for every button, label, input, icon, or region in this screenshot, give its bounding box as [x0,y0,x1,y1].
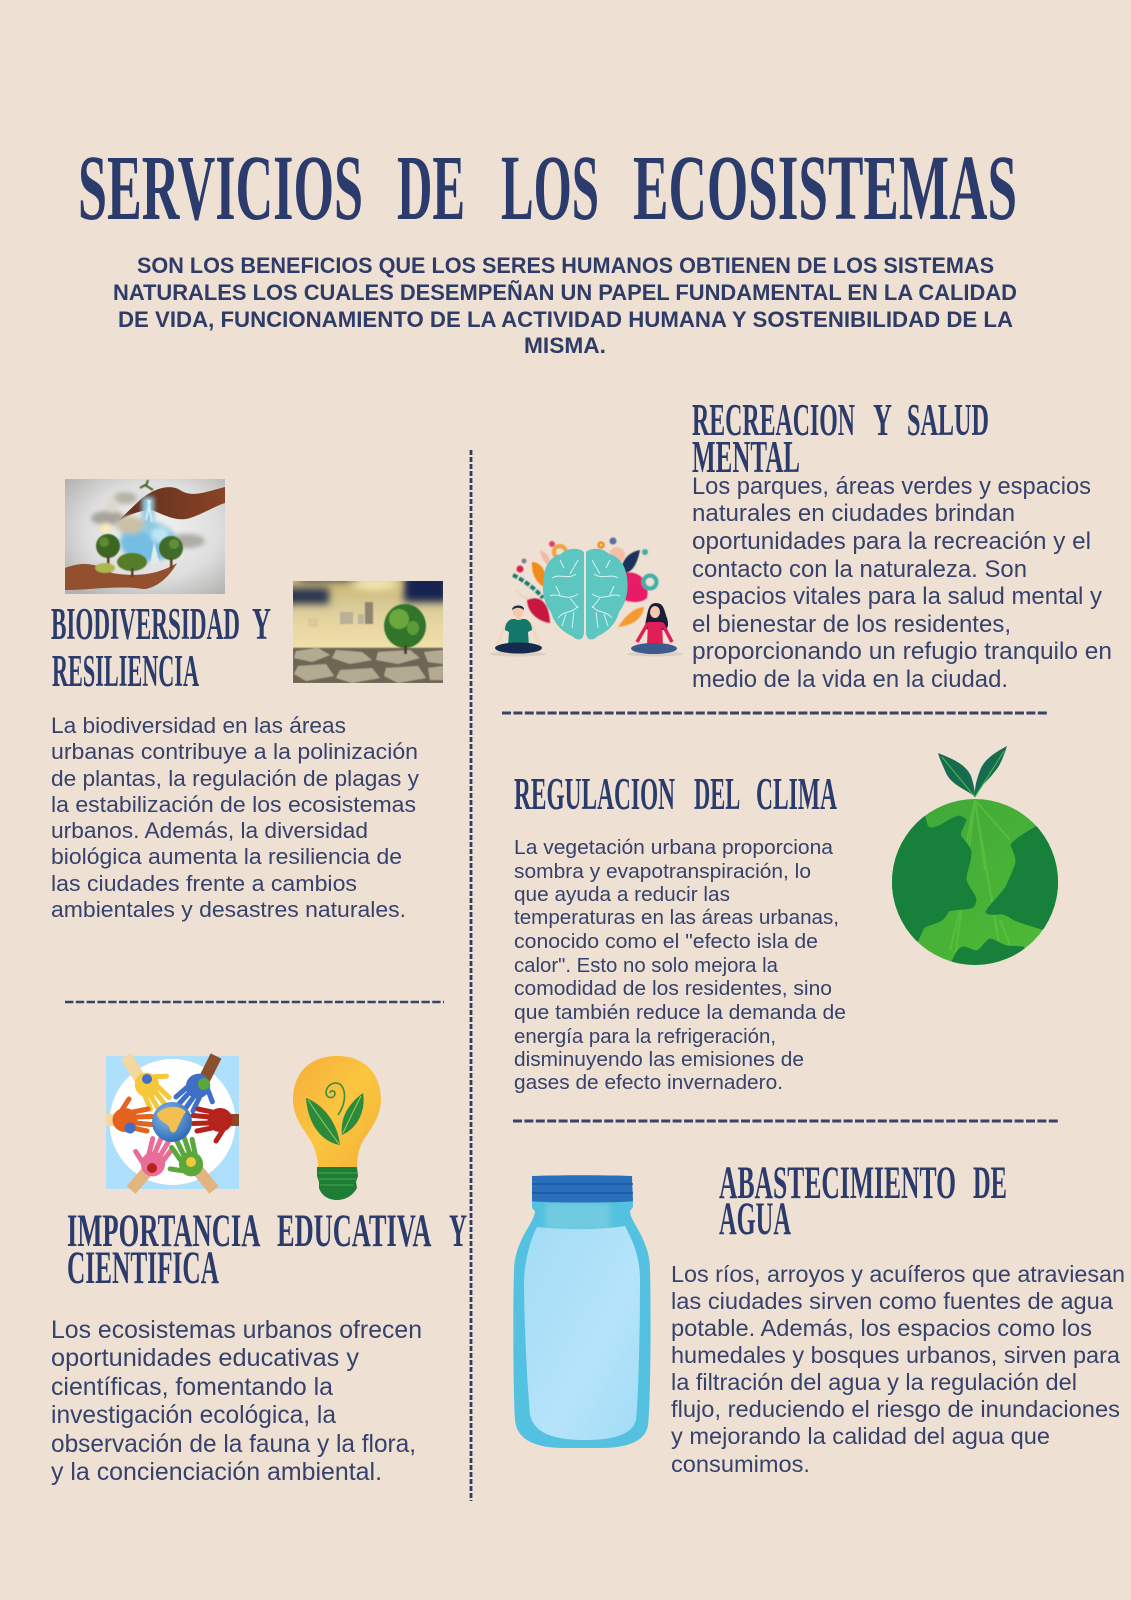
heading: recreacion y salud mental [692,394,989,482]
text: regulacion del clima: energía para la refrigeración, [514,1025,776,1048]
text: recreacion: espacios vitales para la salud mental y [692,583,1102,610]
text: biodiversidad: biológica aumenta la resiliencia de [51,844,402,869]
icon: green globe with leaves [892,746,1058,965]
text: regulacion del clima: temperaturas en las áreas urbanas, [514,906,839,929]
text: abastecimiento de agua: Los ríos, arroyos y acuíferos que atraviesan [671,1261,1125,1287]
text: abastecimiento de agua: la filtración del agua y la regulación del [671,1369,1077,1395]
text: regulacion del clima: comodidad de los residentes, sino [514,977,832,1000]
text: abastecimiento de agua: consumimos. [671,1451,810,1477]
text: biodiversidad: de plantas, la regulación de plagas y [51,766,420,791]
intro text: NATURALES LOS CUALES DESEMPEÑAN UN PAPEL FUNDAMENTAL EN LA CALIDAD [113,280,1017,305]
heading: recreacion y salud mental: SALUD [907,394,989,445]
text: recreacion: Los parques, áreas verdes y espacios [692,473,1091,500]
text: recreacion: el bienestar de los residentes, [692,611,1011,638]
text: regulacion del clima: sombra y evapotranspiración, lo [514,860,811,883]
text: abastecimiento de agua: humedales y bosques urbanos, sirven para [671,1342,1121,1368]
icon: brain and meditating people [490,538,683,656]
heading: biodiversidad y resiliencia [51,599,271,696]
text: abastecimiento de agua: potable. Además, los espacios como los [671,1315,1092,1341]
heading: abastecimiento de agua: AGUA [719,1193,791,1245]
title: SERVICIOS [78,137,363,240]
intro text: DE VIDA, FUNCIONAMIENTO DE LA ACTIVIDAD HUMANA Y SOSTENIBILIDAD DE LA [118,307,1013,332]
heading: recreacion y salud mental: MENTAL [692,431,800,482]
text: abastecimiento de agua: y mejorando la calidad del agua que [671,1423,1050,1449]
text: biodiversidad: urbanas contribuye a la polinización [51,739,418,764]
text: importancia educativa: científicas, fomentando la [51,1374,333,1401]
text: biodiversidad: La biodiversidad en las áreas [51,713,346,738]
heading: importancia educativa y cientifica: IMPORTANCIA [67,1205,260,1257]
text: abastecimiento de agua [671,1261,1125,1477]
heading: regulacion del clima: DEL [694,768,739,819]
text: importancia educativa: oportunidades educativas y [51,1345,360,1372]
text: abastecimiento de agua: las ciudades sirven como fuentes de agua [671,1288,1114,1314]
text: regulacion del clima: que ayuda a reducir las [514,883,730,906]
text: recreacion [692,473,1112,693]
text: biodiversidad [51,713,420,922]
intro text [113,253,1017,358]
icon: water jar [513,1175,651,1448]
title: DE [397,137,465,240]
text: regulacion del clima: La vegetación urbana proporciona [514,836,834,859]
heading: abastecimiento de agua: DE [973,1157,1007,1209]
heading: regulacion del clima: CLIMA [756,768,837,819]
text: regulacion del clima [514,836,846,1094]
heading: abastecimiento de agua [719,1157,1007,1245]
text: biodiversidad: ambientales y desastres naturales. [51,897,406,922]
heading: regulacion del clima: REGULACION [514,768,675,819]
text: importancia educativa: Los ecosistemas urbanos ofrecen [51,1317,422,1344]
text: regulacion del clima: conocido como el "efecto isla de [514,930,818,953]
text: importancia educativa: observación de la fauna y la flora, [51,1431,416,1458]
heading: importancia educativa y cientifica: Y [449,1205,467,1257]
icon: light bulb with leaves [293,1056,381,1200]
text: recreacion: proporcionando un refugio tranquilo en [692,638,1112,665]
title: LOS [501,137,599,240]
text: recreacion: oportunidades para la recreación y el [692,528,1091,555]
text: importancia educativa: y la concienciación ambiental. [51,1459,382,1486]
heading: importancia educativa y cientifica [67,1205,467,1294]
text: recreacion: naturales en ciudades brindan [692,500,1015,527]
heading: recreacion y salud mental: RECREACION [692,394,855,445]
intro text: MISMA. [524,333,606,358]
text: biodiversidad: urbanos. Además, la diversidad [51,818,368,843]
intro text: SON LOS BENEFICIOS QUE LOS SERES HUMANOS OBTIENEN DE LOS SISTEMAS [137,253,994,278]
icon: hands around the world [106,1056,239,1190]
heading: biodiversidad y resiliencia: BIODIVERSIDAD [51,599,240,649]
text: regulacion del clima: que también reduce la demanda de [514,1001,846,1024]
text: recreacion: medio de la vida en la ciudad. [692,666,1008,693]
text: regulacion del clima: gases de efecto invernadero. [514,1071,783,1094]
text: importancia educativa: investigación ecológica, la [51,1402,336,1429]
text: regulacion del clima: calor". Esto no solo mejora la [514,954,779,977]
text: regulacion del clima: disminuyendo las emisiones de [514,1048,804,1071]
heading: biodiversidad y resiliencia: RESILIENCIA [52,646,199,696]
heading: importancia educativa y cientifica: CIENTIFICA [67,1242,219,1294]
heading: recreacion y salud mental: Y [873,394,892,445]
photo: dry land and tree [293,581,443,683]
heading: biodiversidad y resiliencia: Y [252,599,271,649]
text: recreacion: contacto con la naturaleza. Son [692,556,1027,583]
text: biodiversidad: las ciudades frente a cambios [51,871,357,896]
text: biodiversidad: la estabilización de los ecosistemas [51,792,416,817]
heading: importancia educativa y cientifica: EDUCATIVA [277,1205,431,1257]
text: abastecimiento de agua: flujo, reduciendo el riesgo de inundaciones [671,1396,1120,1422]
photo: hands holding nature [65,479,225,594]
text: importancia educativa [51,1317,422,1486]
